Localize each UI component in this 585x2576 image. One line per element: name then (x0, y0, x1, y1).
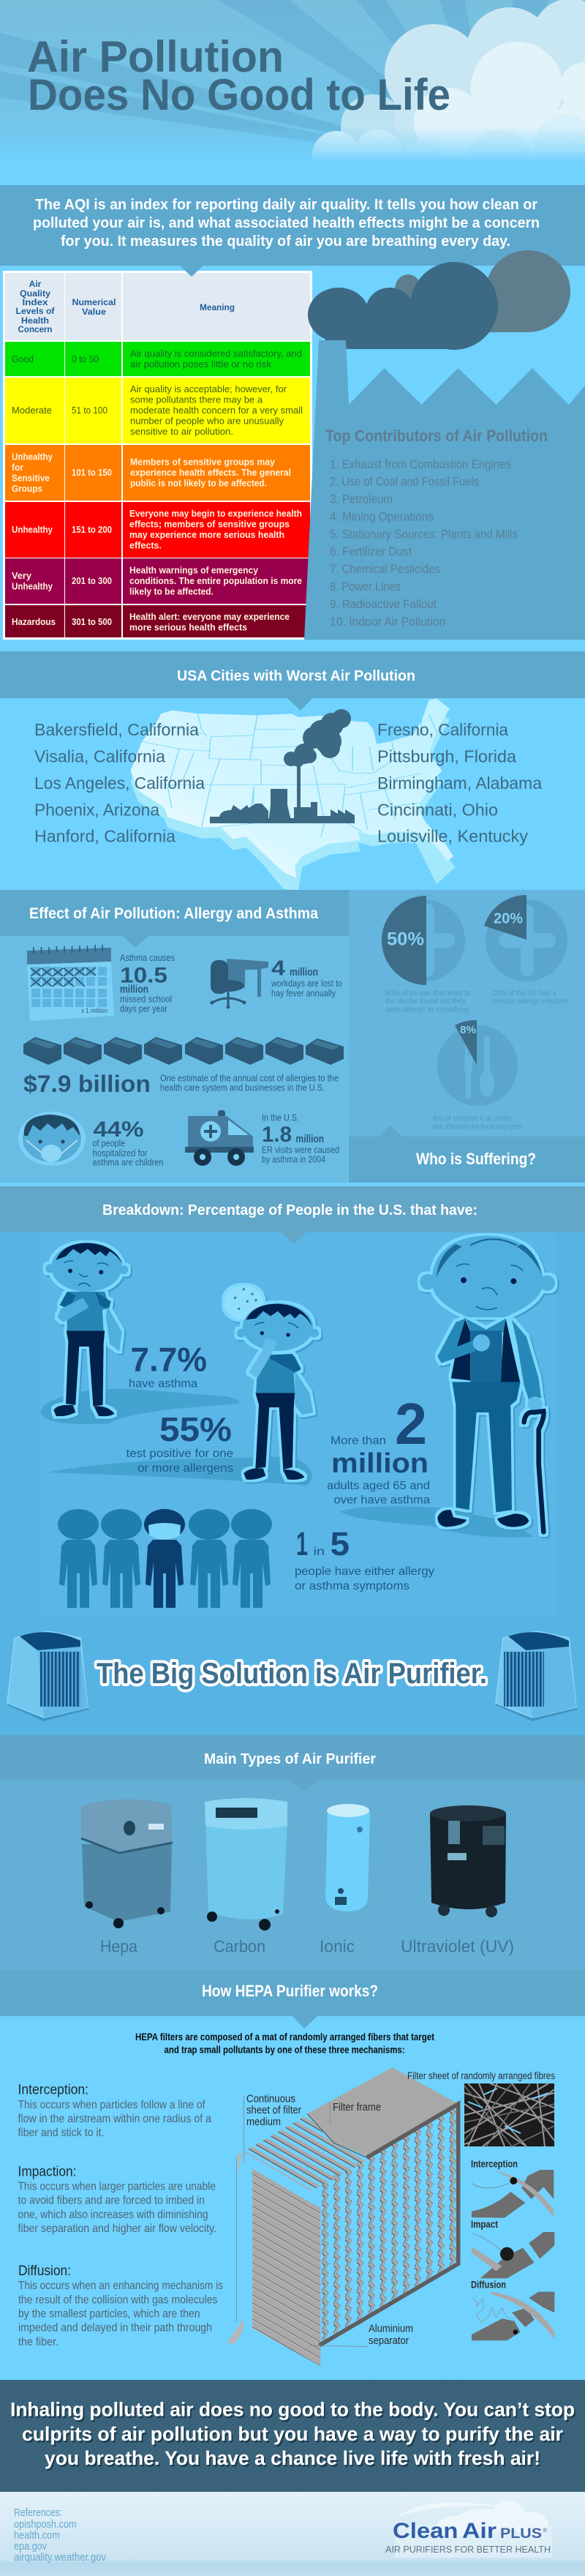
text block: ER visits: million (295, 1133, 324, 1145)
panel: top contributors: 3. Petroleum (330, 492, 393, 506)
text block: impaction: This occurs when larger particles are unable (18, 2181, 216, 2193)
text block: cities left: Bakersfield, California (34, 720, 199, 739)
text block: interception: fiber and stick to it. (18, 2127, 104, 2139)
logo: Clean Air Plus: Air (462, 2519, 497, 2543)
row: moderate: moderate health concern for a very small (130, 405, 303, 416)
text block: 1 in 5: 1 (296, 1525, 308, 1562)
text block: 20% caption (493, 989, 568, 1006)
heading: USA cities (0, 651, 585, 698)
text block: references: opishposh.com (14, 2518, 76, 2531)
chart: interception mechanism: Interception (471, 2159, 518, 2169)
arrow: cities pointer (287, 698, 312, 711)
icon: money boxes (23, 1037, 344, 1065)
panel: footer (0, 2492, 585, 2576)
text block: impaction (18, 2165, 216, 2235)
table header row: Quality (20, 288, 50, 299)
intro band: polluted your air is, and what associated health effects might be a concern (33, 215, 540, 231)
panel: main types of air purifier (0, 1735, 585, 1970)
icon: ionic purifier (325, 1804, 370, 1912)
text block: workdays: million (290, 966, 318, 978)
text block: filter diagram labels: sheet of filter (246, 2104, 301, 2116)
text block: cost of allergies: One estimate of the annual cost of allergies to the (160, 1073, 339, 1083)
heading: how hepa purifier works: How HEPA Purifier works? (202, 1982, 378, 2000)
text block: 2 million adults (327, 1391, 430, 1506)
text block: diffusion: the result of the collision with gas molecules (18, 2294, 218, 2307)
text block: ER visits: by asthma in 2004 (262, 1153, 325, 1165)
chart: interception mechanism (471, 2159, 554, 2218)
row: unhealthy: 151 to 200 (72, 525, 112, 535)
text block: 2 million adults: million (331, 1448, 429, 1479)
panel: top contributors: 1. Exhaust from Combustion Engines (330, 457, 511, 471)
text block: filter diagram labels: Filter frame (333, 2101, 381, 2113)
row: hazardous: Hazardous (12, 617, 56, 627)
header: sky, rays and clouds (0, 0, 585, 195)
icon: logo cloud (395, 2501, 552, 2558)
text block: 50% caption: 50% of people that went to (385, 989, 470, 997)
heading: the big solution: The Big Solution is Air Purifier. (97, 1658, 487, 1690)
panel: AQI table (3, 271, 312, 640)
panel: who is suffering (349, 890, 585, 1183)
icon: calendar (27, 945, 114, 1021)
icon: factory silhouette with contributors (304, 340, 585, 640)
heading: who is suffering (349, 1126, 585, 1183)
text block: impaction: to avoid fibers and are forced to imbed in (18, 2194, 205, 2207)
text block: interception: This occurs when particles follow a line of (18, 2099, 205, 2111)
text block: cities right: Cincinnati, Ohio (377, 801, 498, 820)
row: hazardous: Health alert: everyone may experience (129, 612, 290, 622)
chart: 8% pie (437, 1020, 518, 1106)
panel: closing statement: you breathe. You have a chance live life with fresh air! (45, 2447, 540, 2469)
text: hepa: Hepa (100, 1936, 137, 1955)
text block: 55%: 55% (159, 1410, 232, 1448)
text block: cities left: Phoenix, Arizona (34, 801, 159, 820)
panel: top contributors: 2. Use of Coal and Fossil Fuels (330, 474, 479, 489)
heading: USA cities: USA Cities with Worst Air Pollution (177, 668, 415, 684)
row: unhealthy for sensitive groups: Members of sensitive groups may (130, 457, 275, 467)
panel: top contributors: 7. Chemical Pesticides (330, 562, 440, 576)
text block: hospitalized children: asthma are children (92, 1156, 164, 1168)
text: carbon: Carbon (214, 1936, 265, 1955)
text block: 7.7%: have asthma (129, 1377, 197, 1390)
text block: references: health.com (14, 2529, 60, 2542)
row: very unhealthy: Unhealthy (12, 581, 53, 591)
text block: diffusion (18, 2264, 223, 2348)
panel: top contributors: 6. Fertilizer Dust (330, 544, 412, 558)
intro band: for you. It measures the quality of air you are breathing every day. (61, 233, 510, 250)
icon: group of five people (58, 1509, 272, 1608)
table header row: Index (22, 297, 48, 307)
icon: hepa purifier (81, 1799, 173, 1928)
panel: closing statement: Inhaling polluted air does no good to the body. You can’t stop (10, 2399, 575, 2421)
table header row: Air (29, 279, 42, 289)
text: ionic: Ionic (320, 1936, 355, 1955)
text block: references: References: (14, 2506, 62, 2519)
text block: cities left (34, 720, 205, 846)
heading: breakdown: Breakdown: Percentage of People in the U.S. that have: (102, 1202, 478, 1218)
text block: interception: flow in the airstream within one radius of a (18, 2113, 211, 2125)
table header row: Levels of (16, 306, 56, 316)
text block: cities right: Fresno, California (377, 720, 508, 739)
panel: closing statement (0, 2380, 585, 2492)
text block: 1 in 5: 5 (331, 1525, 350, 1562)
chart: impact mechanism (471, 2219, 554, 2278)
row: unhealthy for sensitive groups: experience health effects. The general (130, 468, 291, 478)
text block: 2 million adults: adults aged 65 and (327, 1480, 430, 1492)
panel: closing statement: culprits of air pollution but you have a way to purify the air (22, 2423, 563, 2445)
text block: cities left: Los Angeles, California (34, 774, 205, 793)
chart: 20% pie (484, 895, 567, 981)
panel: top contributors: 5. Stationary Sources: Plants and Mills (330, 527, 518, 542)
chart: 20% pie: 20% (494, 910, 523, 926)
text block: 55%: test positive for one (126, 1448, 233, 1460)
text block: 8% caption: 8% of children 6 or under (433, 1114, 513, 1123)
text block: 50% caption: were allergic to something (385, 1006, 469, 1014)
text block: workdays: hay fever annually (271, 988, 336, 998)
text block: 2 million adults: over have asthma (333, 1494, 430, 1506)
heading: main types (0, 1735, 585, 1781)
chart: HEPA filter cutaway diagram (227, 2067, 458, 2366)
text block: school days: million (120, 984, 148, 995)
text block: diffusion: Diffusion: (18, 2264, 71, 2279)
title: Air Pollution (27, 32, 284, 81)
panel: top contributors: 9. Radioactive Fallout (330, 597, 437, 611)
chart: impact mechanism: Impact (471, 2219, 498, 2230)
row: unhealthy: Unhealthy (12, 525, 53, 535)
text block: 1 in 5: people have either allergy (295, 1565, 434, 1578)
icon: factory with smoke (210, 709, 355, 823)
text block: ER visits (262, 1112, 339, 1165)
row: good: Air quality is considered satisfactory, and (130, 348, 302, 359)
text block: school days: Asthma causes (120, 952, 175, 963)
text block: cities left: Visalia, California (34, 746, 165, 765)
heading: how hepa purifier works (0, 1970, 585, 2016)
text block: 55% (126, 1410, 233, 1475)
text block: workdays: workdays are lost to (271, 978, 342, 989)
text block: interception (18, 2083, 211, 2139)
row: unhealthy: may experience more serious health (129, 530, 284, 540)
text block: references: airquality.weather.gov (14, 2551, 106, 2564)
icon: ambulance (185, 1110, 254, 1166)
row: unhealthy for sensitive groups: Unhealthy (12, 452, 53, 463)
heading: main types: Main Types of Air Purifier (204, 1751, 376, 1767)
panel: top contributors: 8. Power Lines (330, 580, 401, 594)
text block: filter diagram labels: medium (246, 2116, 281, 2128)
row: hazardous: more serious health effects (129, 622, 247, 632)
row: unhealthy for sensitive groups: public is not likely to be affected. (130, 479, 267, 489)
arrow: hepa pointer (292, 2016, 317, 2029)
table header row: Numerical (72, 297, 116, 307)
chart: 50% pie (382, 896, 465, 985)
chart: 50% pie: 50% (387, 929, 424, 950)
row: unhealthy for sensitive groups: Groups (12, 484, 42, 494)
text block: impaction: Impaction: (18, 2165, 76, 2179)
text block: hospitalized children (92, 1117, 164, 1168)
row: very unhealthy: 201 to 300 (72, 576, 112, 586)
heading: who is suffering: Who is Suffering? (416, 1150, 536, 1168)
table header row (5, 273, 310, 340)
text block: diffusion: This occurs when an enhancing mechanism is (18, 2280, 223, 2292)
text block: filter diagram labels: Continuous (246, 2093, 295, 2105)
text block: diffusion: by the smallest particles, which are then (18, 2308, 200, 2320)
text block: filter diagram labels: separator (369, 2334, 409, 2347)
row: unhealthy: effects. (129, 540, 162, 550)
panel: top contributors (325, 427, 548, 629)
text block: filter diagram labels (246, 2070, 555, 2347)
row: unhealthy: effects; members of sensitive groups (129, 520, 290, 530)
title (27, 32, 450, 119)
text block: hospitalized children: hospitalized for (92, 1147, 148, 1158)
icon: old man with cane (420, 1235, 555, 1532)
row: unhealthy: Everyone may begin to experience health (129, 509, 302, 519)
row: moderate (5, 378, 310, 443)
row: good (5, 342, 310, 376)
text: ultraviolet: Ultraviolet (UV) (401, 1936, 514, 1955)
logo: Clean Air Plus: PLUS (500, 2526, 542, 2542)
row: very unhealthy: conditions. The entire population is more (129, 576, 302, 586)
map of the USA (131, 698, 455, 891)
arrow: intro pointer (180, 266, 203, 277)
text block: school days: 10.5 (120, 963, 167, 988)
text block: hepa intro (135, 2031, 434, 2055)
floor shadows (40, 1389, 534, 1538)
text block: cities right (377, 720, 542, 846)
icon: boy with asthma (45, 1243, 128, 1416)
text block: cities right: Birmingham, Alabama (377, 774, 542, 793)
text block: 2 million adults: More than (331, 1434, 386, 1448)
text block: cost of allergies: health care system and businesses in the U.S. (160, 1082, 325, 1093)
panel: top contributors: 10. Indoor Air Pollution (330, 615, 445, 629)
panel: top contributors: 4. Mining Operations (330, 509, 434, 524)
row: hazardous (5, 605, 310, 637)
text block: diffusion: the fiber. (18, 2336, 58, 2348)
row: unhealthy for sensitive groups (5, 445, 310, 501)
text block: hospitalized children: 44% (94, 1117, 143, 1142)
text block: 8% caption: are affected by food allergies (433, 1123, 522, 1131)
text block: ER visits: In the U.S. (262, 1112, 299, 1123)
text block: 7.7%: 7.7% (130, 1341, 207, 1379)
table header row: Meaning (200, 302, 235, 312)
icon: calendar: x 1 million (81, 1007, 107, 1014)
text block: workdays: 4 (271, 957, 285, 981)
title: Does No Good to Life (28, 70, 450, 119)
text block: ER visits: 1.8 (262, 1123, 292, 1147)
panel: breakdown (0, 1186, 585, 1735)
table header row: Concern (18, 324, 53, 334)
arrow: effect pointer (123, 936, 148, 948)
text block: cost of allergies: $7.9 billion (23, 1071, 151, 1097)
text block: 20% caption: 20% of the US had a (493, 989, 556, 997)
panel: top contributors: Top Contributors of Air Pollution (325, 427, 548, 445)
row: very unhealthy: likely to be affected. (129, 587, 214, 597)
text block: 50% caption: the doctor found out they (385, 997, 467, 1006)
text block: school days (120, 952, 175, 1014)
arrow: types pointer (292, 1781, 317, 1792)
text block: cost of allergies (23, 1071, 339, 1097)
heading: allergy and asthma (0, 890, 349, 936)
heading: breakdown (0, 1186, 585, 1232)
row: unhealthy for sensitive groups: Sensitive (12, 473, 50, 483)
text block: 1 in 5 (295, 1525, 434, 1592)
text block: 8% caption (433, 1114, 522, 1131)
text block: impaction: one, which also increases with diminishing (18, 2209, 208, 2221)
text block: 2 million adults: 2 (395, 1391, 427, 1456)
text block: filter diagram labels: Filter sheet of randomly arranged fibres (407, 2070, 555, 2081)
chart: diffusion mechanism (471, 2279, 554, 2340)
logo: Clean Air Plus: Clean (393, 2519, 458, 2543)
icon: room purifier left (7, 1631, 89, 1721)
text block: hospitalized children: of people (92, 1137, 125, 1149)
row: very unhealthy (5, 558, 310, 604)
text block: 1 in 5: in (313, 1546, 325, 1558)
table header row: Health (21, 315, 49, 326)
icon: boy with allergy and tissue box (224, 1286, 319, 1480)
chart: fibre micrograph (464, 2083, 554, 2146)
icon: carbon purifier (205, 1798, 287, 1931)
row: moderate: 51 to 100 (72, 405, 107, 416)
text block: hepa intro: and trap small pollutants by one of these three mechanisms: (164, 2043, 405, 2055)
text block: school days: missed school (120, 994, 172, 1004)
heading: allergy and asthma: Effect of Air Pollution: Allergy and Asthma (29, 905, 318, 922)
logo: Clean Air Plus (385, 2519, 551, 2555)
text block: filter diagram labels: Aluminium (369, 2323, 413, 2334)
text block: hepa intro: HEPA filters are composed of a mat of randomly arranged fibers that target (135, 2031, 434, 2043)
row: unhealthy (5, 502, 310, 558)
row: moderate: Moderate (12, 405, 52, 416)
icon: office chair and desk (211, 959, 268, 1008)
text block: references: epa.gov (14, 2540, 47, 2553)
text block: school days: days per year (120, 1003, 168, 1014)
text block: cities right: Louisville, Kentucky (377, 827, 529, 846)
row: very unhealthy: Very (12, 571, 31, 581)
row: moderate: some pollutants there may be a (130, 395, 263, 405)
logo: Clean Air Plus: ® (543, 2527, 547, 2534)
row: unhealthy for sensitive groups: for (12, 463, 23, 473)
text block: 55%: or more allergens (137, 1462, 233, 1475)
row: good: Good (12, 354, 34, 364)
panel: effect of air pollution (0, 890, 349, 1183)
text block: cities right: Pittsburgh, Florida (377, 746, 516, 765)
text block: 20% caption: serious allergic reaction (493, 997, 568, 1006)
text block: diffusion: impeded and delayed in their path through (18, 2321, 212, 2334)
text block: 1 in 5: or asthma symptoms (295, 1580, 410, 1592)
text block: references (14, 2506, 106, 2564)
chart: diffusion mechanism: Diffusion (471, 2279, 506, 2291)
logo: Clean Air Plus: AIR PURIFIERS FOR BETTER HEALTH (385, 2545, 551, 2555)
intro band (0, 185, 585, 266)
icon: smoke clouds (308, 250, 570, 350)
table header row: Value (82, 307, 106, 317)
row: very unhealthy: Health warnings of emergency (129, 565, 258, 575)
row: moderate: Air quality is acceptable; however, for (130, 384, 287, 394)
row: good: air pollution poses little or no risk (130, 359, 272, 370)
text block: ER visits: ER visits were caused (262, 1145, 339, 1155)
icon: ultraviolet purifier (430, 1805, 506, 1917)
intro band: The AQI is an index for reporting daily air quality. It tells you how clean or (35, 197, 537, 213)
row: moderate: number of people who are unusually (130, 416, 284, 426)
row: hazardous: 301 to 500 (72, 617, 112, 627)
row: moderate: sensitive to air pollution. (130, 427, 233, 437)
text block: interception: Interception: (18, 2083, 88, 2097)
icon: child with mask (18, 1112, 86, 1166)
icon: room purifier right (496, 1631, 578, 1721)
text block: workdays (271, 957, 342, 998)
text block: 50% caption (385, 989, 470, 1014)
chart: 8% pie: 8% (460, 1024, 476, 1036)
arrow: breakdown pointer (282, 1232, 306, 1244)
row: unhealthy for sensitive groups: 101 to 150 (72, 468, 112, 478)
row: good: 0 to 50 (72, 354, 99, 364)
text block: cities left: Hanford, California (34, 827, 176, 846)
text block: impaction: fiber separation and higher air flow velocity. (18, 2223, 216, 2235)
